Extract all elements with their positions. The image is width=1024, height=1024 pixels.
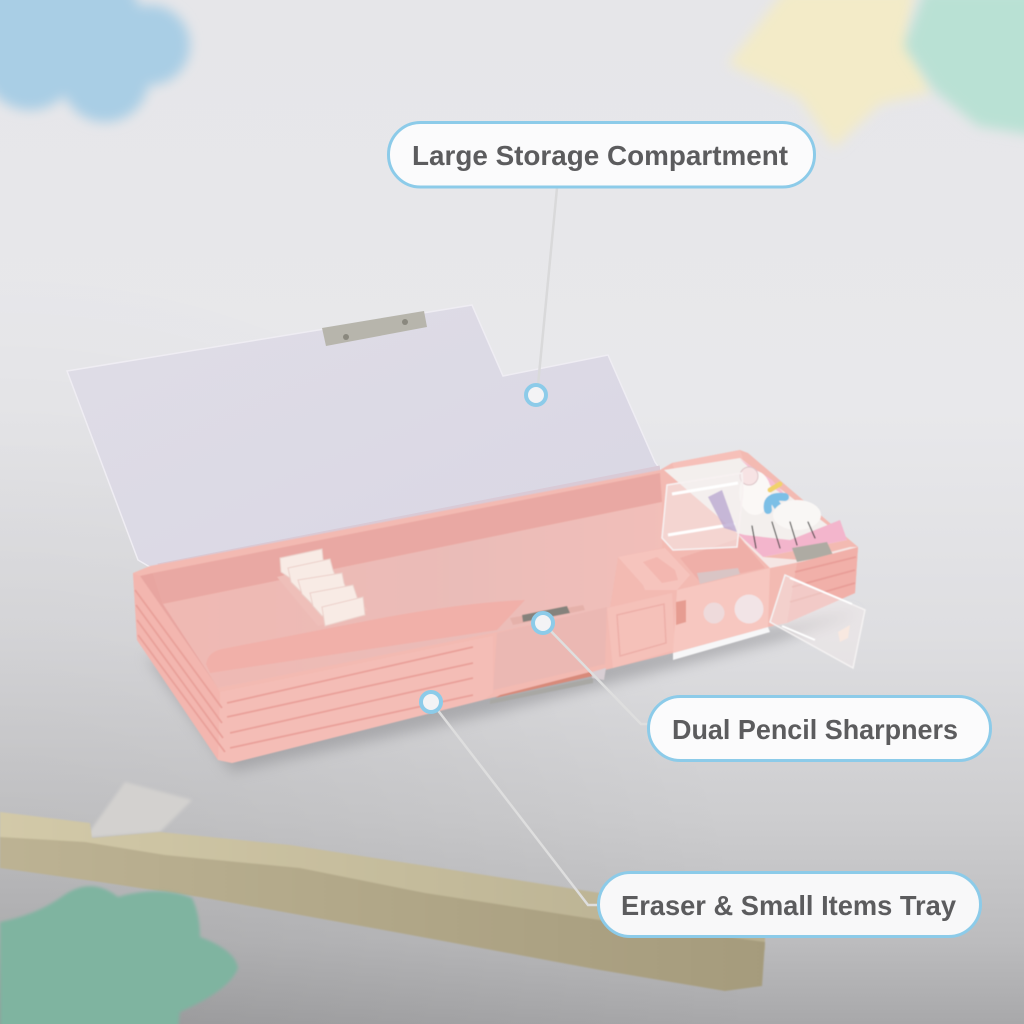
lid hinge plate: [322, 311, 427, 346]
clear hinge strip: [737, 533, 858, 568]
ruler on the table: [0, 812, 765, 991]
white paper edge: [673, 627, 770, 660]
front ribbed panel: [218, 636, 493, 763]
inner well: [680, 538, 765, 582]
door panel: [607, 593, 675, 668]
clear open door: [770, 575, 865, 668]
label pill: Dual Pencil Sharpners: [672, 714, 958, 745]
right ribbed end: [787, 547, 858, 623]
left inner wall: [140, 573, 218, 688]
label pill: Large Storage Compartment: [412, 140, 788, 171]
top pink bar: [672, 450, 743, 477]
case body: [133, 450, 858, 763]
pen rest ridge: [206, 600, 525, 673]
floor: [163, 502, 662, 688]
marker dot: [526, 385, 546, 405]
unicorn sticker: [664, 458, 847, 557]
green cloud decoration: [0, 886, 238, 1024]
sharpener hole large: [734, 594, 764, 624]
sharpener hole small: [704, 602, 724, 624]
back wall: [153, 473, 662, 604]
opened lid: [67, 305, 662, 570]
marker dot: [533, 613, 553, 633]
left ribbed side: [133, 573, 220, 760]
blue cloud decoration: [0, 0, 190, 122]
pink pencil case: [133, 450, 865, 763]
metal bar under block: [490, 668, 606, 704]
leader line: [538, 188, 557, 385]
marker dot: [421, 692, 441, 712]
callout: large storage compartment: [388, 122, 814, 405]
side slot: [676, 600, 686, 625]
label pill: [598, 872, 980, 936]
callout: dual pencil sharpeners: [533, 613, 990, 760]
callout: eraser and small items tray: [421, 692, 980, 936]
case shadow: [145, 612, 860, 772]
sharpener housing: [618, 538, 770, 653]
comb base plate: [277, 565, 368, 626]
unicorn figure: [739, 467, 821, 548]
sharpener slot: [510, 605, 585, 625]
clear flip cover: [662, 473, 743, 550]
white comb dividers: [280, 549, 365, 626]
leader line: [433, 704, 600, 905]
leader line: [545, 625, 650, 724]
green star decoration: [904, 0, 1024, 136]
yellow star decoration: [728, 0, 932, 148]
label pill: Eraser & Small Items Tray: [621, 890, 956, 921]
paper scrap on ruler: [85, 782, 192, 838]
label pill: [388, 122, 814, 187]
label pill: [648, 696, 990, 760]
slider button: [643, 557, 678, 583]
metal clasp: [792, 542, 833, 562]
center sliding block: [493, 607, 607, 690]
